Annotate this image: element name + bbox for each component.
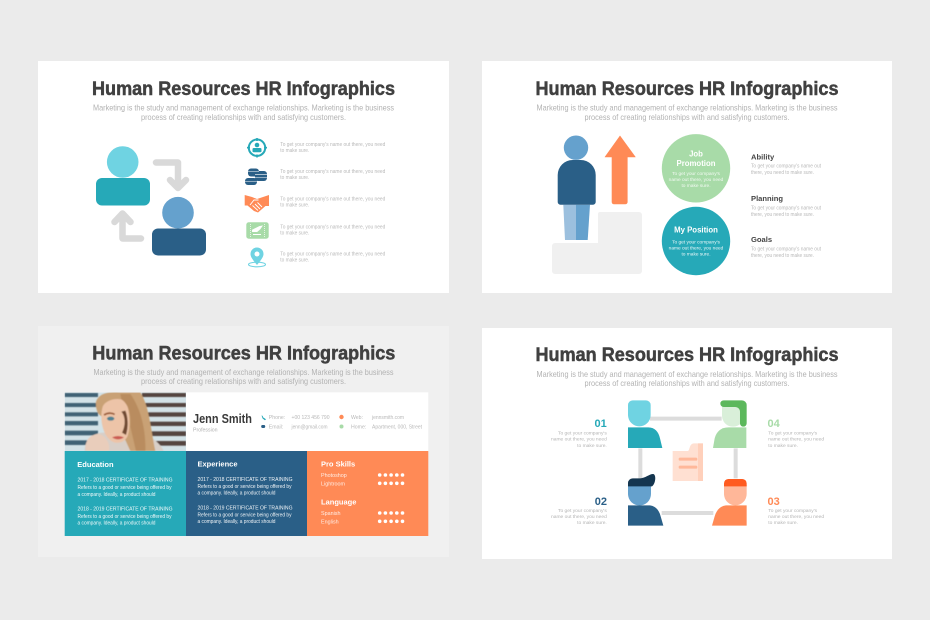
list: goals: Goals — [751, 235, 772, 244]
label: 04: to make sure. — [768, 443, 798, 449]
contact details — [261, 415, 423, 430]
arrow: down — [156, 162, 186, 188]
column: experience: a company. Ideally, a product should — [198, 491, 276, 497]
person: 03 — [712, 479, 747, 526]
label: 04: To get your company's — [768, 430, 818, 436]
captions: to make sure. — [280, 148, 309, 154]
subtitle: process of creating relationships with and satisfying customers. — [584, 112, 790, 122]
circle: job promotion: name out there, you need — [669, 177, 724, 183]
list: goals — [751, 235, 822, 259]
column: experience: a company. Ideally, a product should — [198, 519, 276, 525]
column: experience: 2017 - 2018 CERTIFICATE OF TRAINING — [198, 477, 292, 483]
circle: my position: My Position — [674, 226, 718, 234]
person: teal — [96, 146, 150, 206]
captions: To get your company's name out there, you need — [280, 196, 385, 202]
subtitle — [93, 102, 394, 122]
circle: my position — [662, 207, 730, 275]
column: skills and language: Pro Skills — [321, 460, 355, 468]
column: experience: Experience — [198, 460, 238, 468]
icon: target person — [247, 138, 267, 158]
name: Profession — [193, 428, 218, 434]
arrow: up — [114, 214, 141, 238]
list: goals: To get your company's name out — [751, 247, 822, 253]
captions: To get your company's name out there, you need — [280, 142, 385, 148]
icon: handshake — [245, 195, 269, 212]
subtitle — [94, 367, 394, 386]
list: planning: To get your company's name out — [751, 206, 822, 212]
column: education — [65, 451, 186, 536]
label: 02 — [551, 496, 607, 526]
list: ability — [751, 152, 822, 176]
label: 02: name out there, you need — [551, 514, 607, 520]
subtitle: Marketing is the study and management of exchange relationships. Marketing is the business — [93, 102, 394, 112]
column: education: 2017 - 2018 CERTIFICATE OF TRAINING — [78, 478, 172, 484]
label: 04: 04 — [768, 418, 781, 430]
circle: my position: name out there, you need — [669, 245, 724, 251]
label: 04 — [768, 418, 824, 449]
column: education: Refers to a good or service being offered by — [78, 514, 172, 520]
label: 01: 01 — [595, 418, 607, 430]
subtitle: process of creating relationships with and satisfying customers. — [584, 378, 790, 388]
circle: my position: To get your company's — [672, 239, 721, 245]
column: education: Refers to a good or service being offered by — [78, 485, 172, 491]
person: blue — [152, 197, 206, 256]
label: 03 — [768, 496, 824, 526]
name — [193, 412, 252, 434]
label: 01: name out there, you need — [551, 437, 607, 443]
contact details: Home: — [351, 424, 366, 430]
header card — [65, 392, 428, 451]
document icon — [673, 443, 703, 481]
column: skills and language — [307, 451, 428, 536]
circle: job promotion: to make sure. — [681, 183, 711, 189]
captions: to make sure. — [280, 257, 309, 263]
icon: coins — [245, 168, 267, 185]
circle: job promotion: Job — [689, 150, 703, 158]
label: 03: to make sure. — [768, 520, 798, 526]
label: 01 — [551, 418, 607, 449]
subtitle: process of creating relationships with and satisfying customers. — [141, 112, 346, 122]
captions: to make sure. — [280, 231, 309, 237]
panel: job promotion — [482, 61, 892, 293]
column: skills and language: English — [321, 519, 339, 525]
list: planning — [751, 194, 822, 218]
contact details: +00 123 456 790 — [292, 415, 330, 421]
label: 02: 02 — [595, 496, 607, 508]
person: 01 — [628, 400, 662, 448]
captions: To get your company's name out there, you need — [280, 225, 385, 231]
panel: exchange of people — [38, 61, 449, 293]
standing person — [558, 136, 596, 240]
column: education: a company. Ideally, a product should — [78, 492, 156, 498]
column: experience: Refers to a good or service being offered by — [198, 512, 292, 518]
list: goals: there, you need to make sure. — [751, 253, 814, 259]
contact details: Phone: — [269, 415, 285, 421]
panel: resume — [64, 345, 428, 536]
list: planning: there, you need to make sure. — [751, 212, 814, 218]
panel: team network — [482, 328, 892, 559]
label: 02: to make sure. — [577, 520, 607, 526]
name: Jenn Smith — [193, 412, 252, 426]
column: education: 2018 - 2019 CERTIFICATE OF TRAINING — [78, 507, 172, 513]
captions: To get your company's name out there, you need — [280, 251, 385, 257]
subtitle: Marketing is the study and management of exchange relationships. Marketing is the business — [536, 102, 838, 112]
circle: my position: to make sure. — [681, 251, 711, 257]
icon: map pin — [248, 248, 266, 267]
captions — [280, 142, 385, 263]
column: education: Education — [77, 460, 114, 469]
column: skills and language: Lightroom — [321, 481, 345, 487]
column: education: a company. Ideally, a product should — [78, 520, 156, 526]
contact details: Web: — [351, 415, 363, 421]
column: skills and language: Language — [321, 497, 356, 506]
photo — [65, 392, 186, 451]
contact details: jenn@gmail.com — [291, 424, 328, 430]
subtitle: process of creating relationships with and satisfying customers. — [141, 376, 346, 386]
steps — [552, 212, 642, 274]
circle: job promotion: Promotion — [677, 159, 716, 168]
column: skills and language: Spanish — [321, 511, 340, 517]
captions: to make sure. — [280, 175, 309, 181]
person: 04 — [713, 400, 747, 448]
list: ability: Ability — [751, 152, 775, 161]
label: 02: To get your company's — [558, 508, 607, 514]
column: experience: 2018 - 2019 CERTIFICATE OF TRAINING — [198, 506, 292, 512]
subtitle — [536, 369, 838, 388]
contact details: Email: — [269, 424, 283, 430]
subtitle: Marketing is the study and management of exchange relationships. Marketing is the business — [94, 367, 394, 377]
label: 03: name out there, you need — [768, 514, 824, 520]
title: Human Resources HR Infographics — [536, 345, 838, 366]
captions: to make sure. — [280, 202, 309, 208]
icon: ticket — [246, 222, 269, 239]
label: 01: To get your company's — [558, 430, 607, 436]
circle: job promotion — [662, 134, 730, 202]
column: skills and language: Photoshop — [321, 473, 347, 479]
captions: To get your company's name out there, you need — [280, 169, 385, 175]
label: 03: To get your company's — [768, 508, 818, 514]
label: 04: name out there, you need — [768, 437, 824, 443]
list: planning: Planning — [751, 194, 783, 203]
label: 01: to make sure. — [577, 443, 607, 449]
title: Human Resources HR Infographics — [92, 344, 395, 364]
contact details: Apartment, 000, Street — [372, 424, 423, 430]
person: 02 — [628, 474, 663, 526]
subtitle — [536, 102, 838, 122]
column: experience — [186, 451, 307, 536]
column: experience: Refers to a good or service being offered by — [198, 484, 292, 490]
title: Human Resources HR Infographics — [92, 79, 395, 100]
arrow: up orange — [605, 136, 635, 204]
list: ability: To get your company's name out — [751, 164, 822, 170]
contact details: jennsmith.com — [371, 415, 404, 421]
subtitle: Marketing is the study and management of exchange relationships. Marketing is the business — [536, 369, 838, 379]
list: ability: there, you need to make sure. — [751, 170, 814, 176]
title: Human Resources HR Infographics — [536, 79, 838, 100]
network diagram — [628, 400, 747, 526]
label: 03: 03 — [768, 496, 780, 508]
circle: job promotion: To get your company's — [672, 171, 721, 177]
